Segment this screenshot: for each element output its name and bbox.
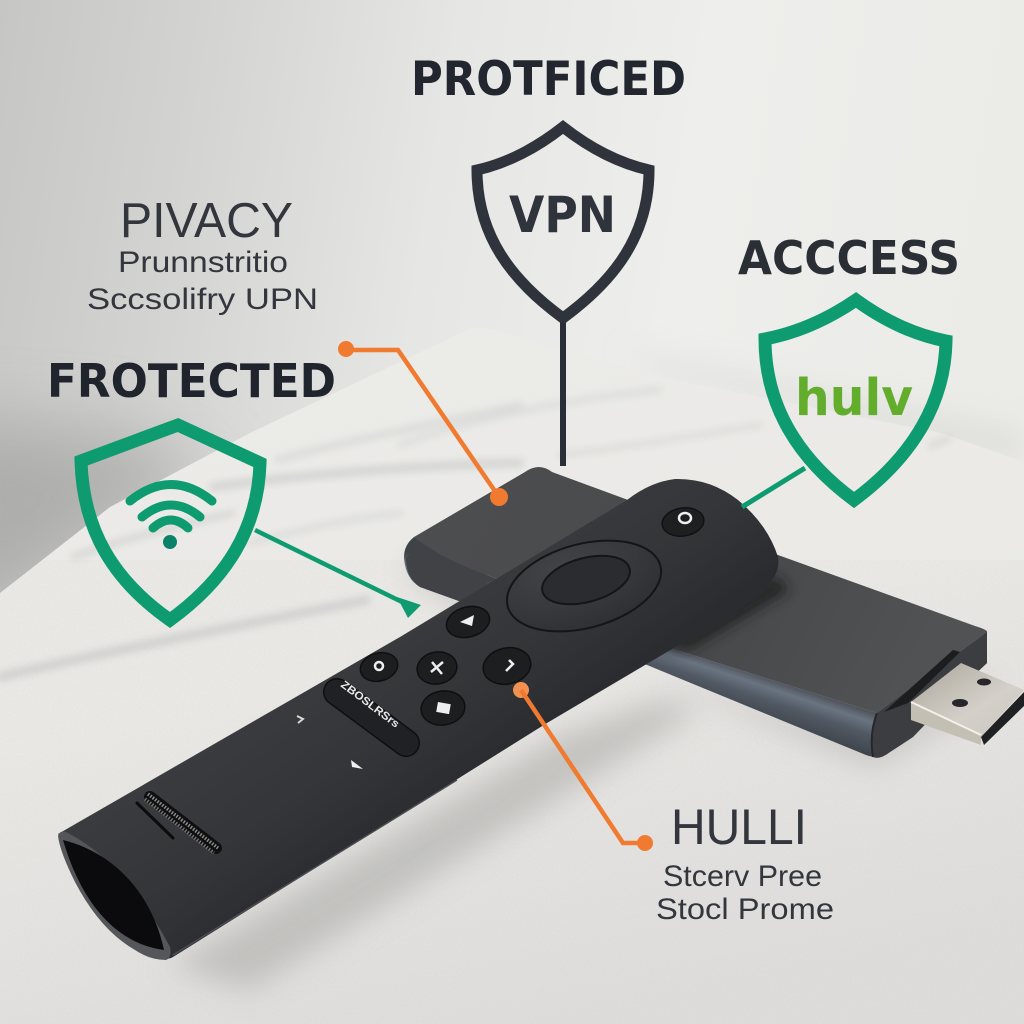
- table grain: [0, 560, 1024, 1024]
- streaming stick body: [404, 467, 987, 758]
- stick front face: [872, 632, 987, 758]
- shield: wifi: [81, 425, 260, 620]
- shield: VPN: VPN: [509, 186, 616, 244]
- button: left: [357, 649, 401, 685]
- shadows under devices: [170, 555, 985, 990]
- shield: hulu: [765, 300, 946, 500]
- text block: PIVACY: Prunnstritio: [118, 246, 288, 279]
- small glyph: [297, 716, 303, 723]
- icon: wifi: [130, 484, 212, 549]
- remote control: [58, 479, 778, 960]
- small arrow glyph: [351, 760, 363, 769]
- stick top face: [414, 467, 987, 713]
- button: lower: [419, 688, 467, 728]
- text block: HULU: Stcerv Pree: [663, 860, 822, 893]
- text block: HULU: Stocl Prome: [656, 893, 834, 926]
- connector: VPN shield to stick: [560, 322, 566, 466]
- pill button: [337, 679, 406, 743]
- remote open end: [58, 832, 170, 960]
- stick side: [404, 537, 987, 757]
- button: top right: [660, 505, 706, 539]
- marble table surface: [0, 328, 1024, 1024]
- text block: HULU: [656, 799, 834, 926]
- heading: FROTECTED: FROTECTED: [47, 354, 336, 408]
- text block: HULU: HULLI: [671, 799, 807, 855]
- remote body: [58, 479, 778, 959]
- title: PROTFICED: PROTFICED: [411, 52, 686, 107]
- text block: PIVACY: Sccsolifry UPN: [87, 283, 318, 316]
- d-pad ring: [497, 525, 671, 647]
- text block: PIVACY: PIVACY: [120, 194, 293, 248]
- button: right: [480, 643, 534, 689]
- remote shadow on stick: [660, 575, 790, 650]
- USB connector: [884, 650, 1024, 745]
- microphone grille: [145, 794, 218, 853]
- slot: [137, 803, 173, 838]
- background wall: [0, 0, 1024, 640]
- shield: VPN: [477, 127, 649, 318]
- button: upper: [443, 602, 493, 642]
- button: centre: [415, 649, 459, 687]
- connector: hulu shield to remote: [742, 468, 805, 507]
- pill button: ZBOSLRSrs: [338, 679, 401, 731]
- connector: wifi shield to remote: [255, 530, 421, 618]
- text block: PIVACY: [87, 194, 318, 316]
- heading: ACCCESS: ACCCESS: [738, 231, 960, 285]
- shield: hulu: hulv: [795, 369, 913, 428]
- callout: orange connector to HULU: [513, 682, 653, 851]
- callout: orange connector to stick: [338, 341, 508, 506]
